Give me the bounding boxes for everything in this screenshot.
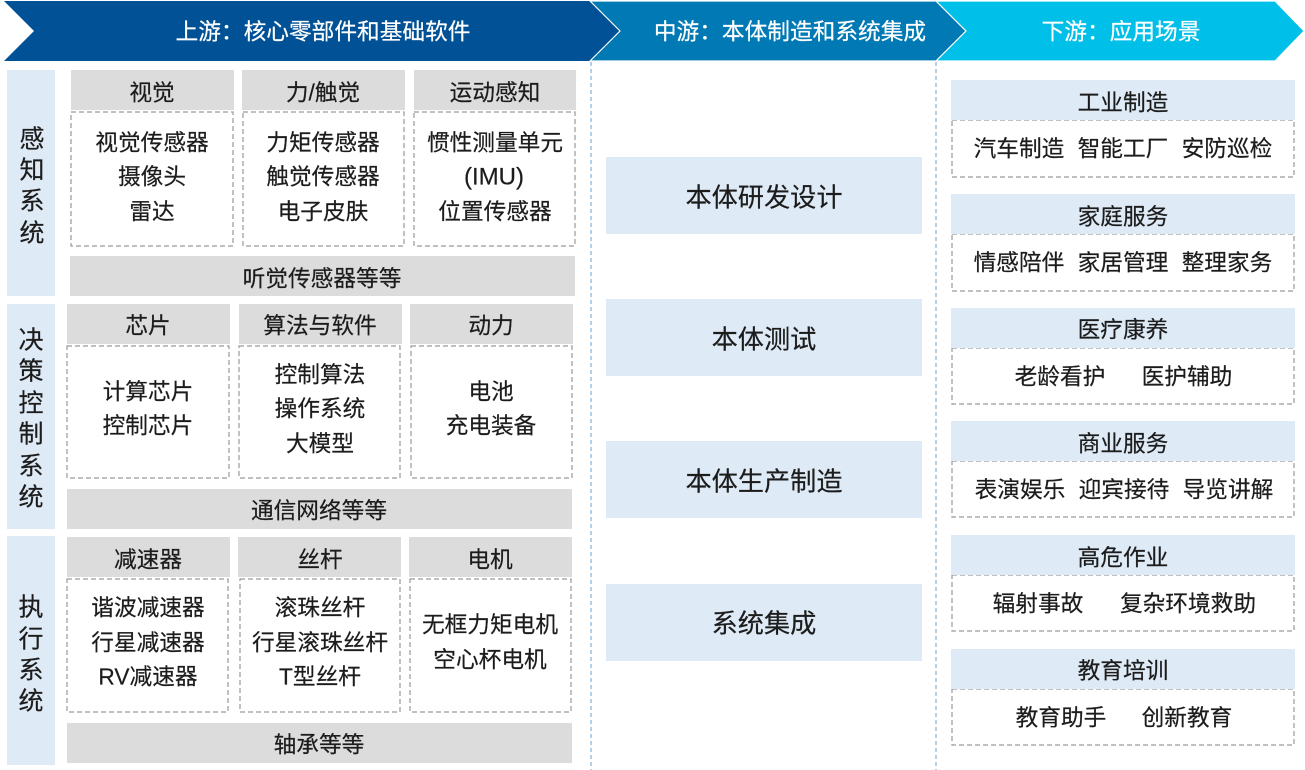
- application: healthcare: [951, 308, 1295, 404]
- panel: downstream applications: [951, 80, 1295, 745]
- side label: actuation: 系: [18, 657, 44, 685]
- application: healthcare: 老龄看护: [1015, 364, 1105, 390]
- application: industrial manufacturing: 智能工厂: [1078, 136, 1168, 162]
- application: home services: 家居管理: [1078, 250, 1168, 276]
- side label: perception: 系: [19, 188, 45, 216]
- column: vision: 雷达: [129, 199, 175, 225]
- header arrow: downstream: 下游：应用场景: [1042, 19, 1200, 45]
- column: force and touch: 触觉传感器: [266, 164, 380, 190]
- column: lead screws: T型丝杆: [279, 664, 361, 690]
- header arrow: upstream: 上游：核心零部件和基础软件: [176, 19, 470, 45]
- bar: hearing sensors: [70, 256, 575, 296]
- side label: actuation: 行: [18, 626, 44, 654]
- panel: decision and control system: [7, 304, 573, 529]
- application: healthcare: 医护辅助: [1142, 364, 1232, 390]
- side label: perception: [7, 70, 55, 296]
- step: system integration: [606, 584, 922, 661]
- application: commercial services: 导览讲解: [1183, 477, 1273, 503]
- side label: perception: 感: [19, 126, 45, 154]
- column: reducers: 谐波减速器: [91, 595, 205, 621]
- step: body manufacturing: 本体生产制造: [685, 467, 843, 497]
- header arrow: upstream: [4, 1, 620, 61]
- column: motion sensing: [414, 70, 576, 246]
- column: power: [410, 304, 573, 478]
- column: motors: 无框力矩电机: [422, 612, 558, 638]
- side label: decision and control: 策: [18, 358, 44, 386]
- application: education: 创新教育: [1142, 705, 1232, 731]
- application: industrial manufacturing: [951, 80, 1295, 177]
- side label: perception: 知: [19, 157, 45, 185]
- column: chips: 计算芯片: [103, 379, 193, 405]
- bar: hearing sensors: 听觉传感器等等: [243, 266, 401, 292]
- application: home services: [951, 194, 1295, 291]
- column: force and touch: 力/触觉: [286, 80, 360, 106]
- side label: actuation: 执: [18, 594, 44, 622]
- application: hazardous work: [951, 535, 1295, 631]
- application: home services: 家庭服务: [1078, 204, 1168, 230]
- side label: decision and control: 统: [18, 484, 44, 512]
- column: power: 充电装备: [446, 413, 537, 439]
- column: motors: 空心杯电机: [433, 647, 547, 673]
- application: hazardous work: 辐射事故: [993, 591, 1083, 617]
- header arrow: downstream: [936, 1, 1304, 61]
- panel: actuation system: [7, 536, 572, 765]
- header arrow: midstream: [590, 1, 966, 61]
- column: power: 电池: [468, 379, 514, 405]
- column: chips: [67, 304, 230, 478]
- application: education: [951, 649, 1295, 745]
- side label: actuation: [7, 536, 55, 765]
- bar: bearings: 轴承等等: [274, 732, 364, 758]
- bar: communication networks: [67, 489, 572, 529]
- column: reducers: [67, 537, 230, 712]
- column: reducers: 行星减速器: [91, 630, 205, 656]
- column: lead screws: [238, 537, 401, 712]
- column: vision: 视觉: [129, 80, 175, 106]
- column: motion sensing: 运动感知: [450, 80, 540, 106]
- side label: decision and control: 系: [18, 453, 44, 481]
- bar: communication networks: 通信网络等等: [251, 498, 387, 524]
- column: reducers: 减速器: [114, 547, 182, 573]
- side label: decision and control: [7, 304, 55, 529]
- application: industrial manufacturing: 安防巡检: [1182, 136, 1272, 162]
- panel: perception system: [7, 70, 576, 296]
- column: motion sensing: 位置传感器: [438, 199, 552, 225]
- column: vision: 摄像头: [118, 164, 186, 190]
- application: hazardous work: 复杂环境救助: [1120, 591, 1256, 617]
- application: commercial services: 迎宾接待: [1079, 477, 1169, 503]
- column: motors: [409, 537, 572, 712]
- application: commercial services: 表演娱乐: [975, 477, 1065, 503]
- side label: decision and control: 控: [18, 390, 44, 418]
- application: education: 教育助手: [1016, 705, 1106, 731]
- column: lead screws: 滚珠丝杆: [275, 595, 365, 621]
- column: lead screws: 行星滚珠丝杆: [252, 630, 388, 656]
- column: motion sensing: (IMU): [464, 164, 524, 191]
- application: industrial manufacturing: 工业制造: [1078, 90, 1169, 116]
- side label: perception: 统: [19, 220, 45, 248]
- application: home services: 整理家务: [1182, 250, 1272, 276]
- step: body manufacturing: [606, 441, 922, 518]
- application: industrial manufacturing: 汽车制造: [974, 136, 1065, 162]
- column: reducers: RV减速器: [98, 664, 198, 690]
- application: hazardous work: 高危作业: [1078, 545, 1168, 571]
- column: algorithms and software: 算法与软件: [263, 313, 377, 339]
- side label: decision and control: 制: [18, 421, 44, 449]
- side label: decision and control: 决: [18, 327, 44, 355]
- column: algorithms and software: 操作系统: [275, 396, 365, 422]
- step: body testing: 本体测试: [712, 325, 816, 355]
- bar: bearings: [67, 723, 572, 763]
- application: commercial services: 商业服务: [1078, 431, 1168, 457]
- application: healthcare: 医疗康养: [1078, 317, 1168, 343]
- column: vision: 视觉传感器: [95, 130, 209, 156]
- application: education: 教育培训: [1078, 658, 1168, 684]
- column: algorithms and software: 大模型: [286, 431, 354, 457]
- column: algorithms and software: [239, 304, 402, 478]
- column: force and touch: 力矩传感器: [266, 130, 380, 156]
- application: commercial services: [951, 421, 1295, 517]
- column: vision: [71, 70, 234, 246]
- step: system integration: 系统集成: [712, 609, 816, 639]
- column: algorithms and software: 控制算法: [275, 362, 365, 388]
- step: body testing: [606, 299, 922, 376]
- step: body design: [606, 157, 922, 234]
- column: power: 动力: [468, 313, 514, 339]
- column: chips: 芯片: [125, 313, 171, 339]
- panel: midstream steps: [606, 157, 922, 661]
- column: chips: 控制芯片: [103, 413, 193, 439]
- column: lead screws: 丝杆: [297, 547, 343, 573]
- step: body design: 本体研发设计: [685, 183, 843, 213]
- application: home services: 情感陪伴: [974, 250, 1064, 276]
- column: motion sensing: 惯性测量单元: [427, 130, 563, 156]
- column: force and touch: 电子皮肤: [278, 199, 369, 225]
- header arrow: midstream: 中游：本体制造和系统集成: [654, 19, 926, 45]
- column: force and touch: [242, 70, 405, 246]
- column: motors: 电机: [467, 547, 513, 573]
- side label: actuation: 统: [18, 688, 44, 716]
